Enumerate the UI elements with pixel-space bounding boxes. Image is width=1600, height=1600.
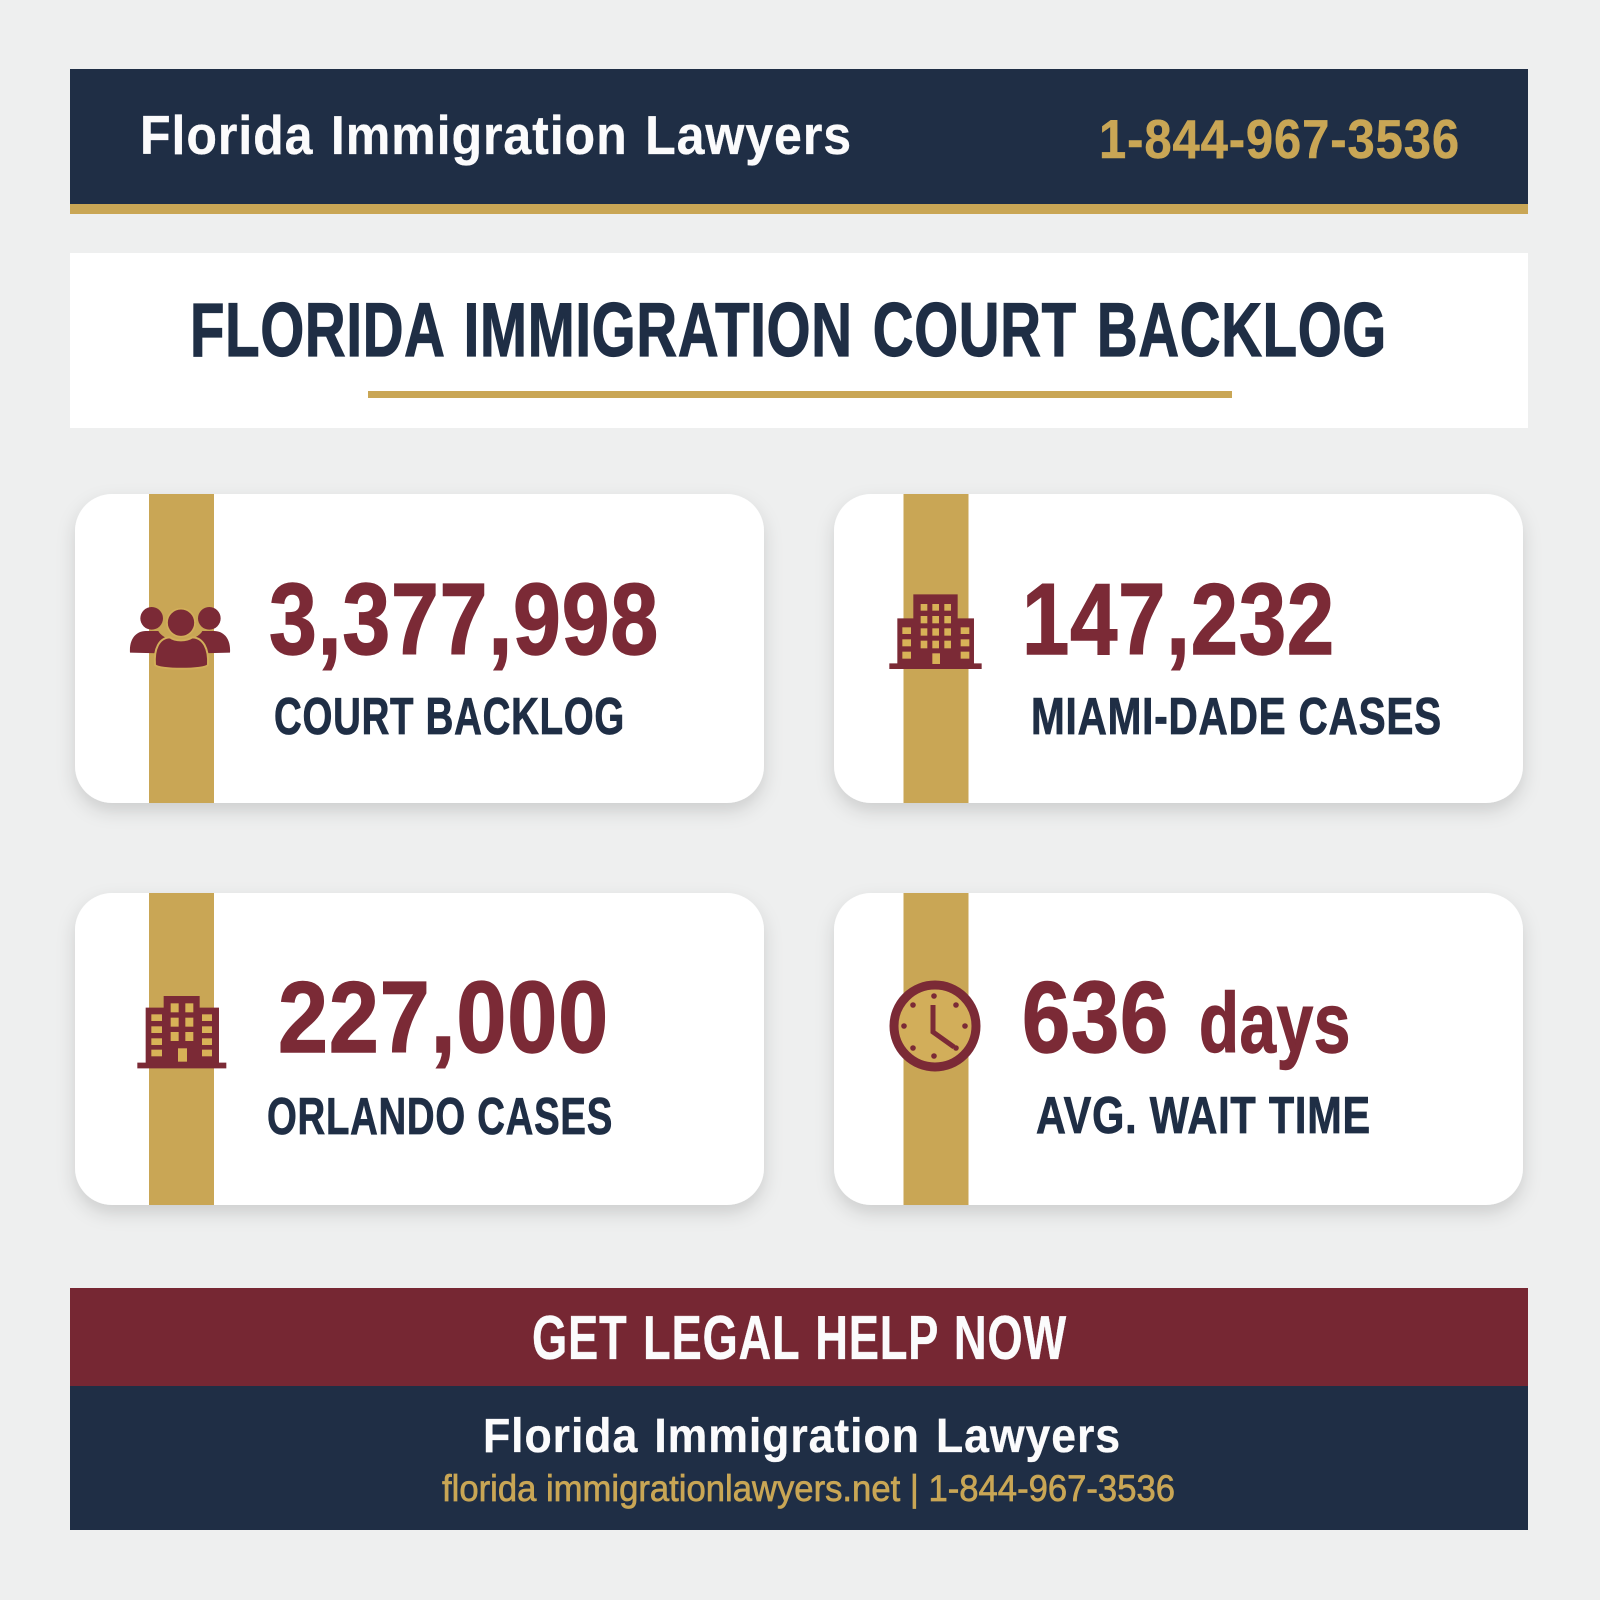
icon: clock	[894, 985, 976, 1067]
stat value: 3,377,998	[269, 564, 659, 676]
icon: people group	[130, 607, 230, 669]
call to action text: GET LEGAL HELP NOW	[532, 1304, 1067, 1373]
header phone number: 1-844-967-3536	[1099, 108, 1460, 170]
header firm name: Florida Immigration Lawyers	[140, 104, 852, 166]
title panel	[70, 253, 1528, 428]
stat label: COURT BACKLOG	[274, 688, 625, 746]
stat card: average wait time	[834, 893, 1523, 1205]
stat label: AVG. WAIT TIME	[1036, 1087, 1371, 1145]
stat card: Miami-Dade cases	[834, 494, 1523, 803]
stat label: ORLANDO CASES	[267, 1088, 613, 1146]
icon: office building	[137, 996, 226, 1068]
footer contact line: florida immigrationlawyers.net | 1-844-967-3536	[442, 1468, 1175, 1509]
stat value: 147,232	[1022, 564, 1335, 676]
footer panel	[70, 1386, 1528, 1530]
stat label: MIAMI-DADE CASES	[1031, 688, 1442, 746]
title underline	[368, 391, 1232, 398]
call to action banner	[70, 1288, 1528, 1386]
stat value: 227,000	[278, 962, 609, 1074]
stat card: court backlog	[75, 494, 764, 803]
stat unit: days	[1199, 976, 1351, 1070]
icon: tall building	[889, 594, 982, 669]
stat card: Orlando cases	[75, 893, 764, 1205]
header bar	[70, 69, 1528, 214]
stat value: 636	[1022, 962, 1169, 1074]
footer firm name: Florida Immigration Lawyers	[483, 1410, 1121, 1463]
